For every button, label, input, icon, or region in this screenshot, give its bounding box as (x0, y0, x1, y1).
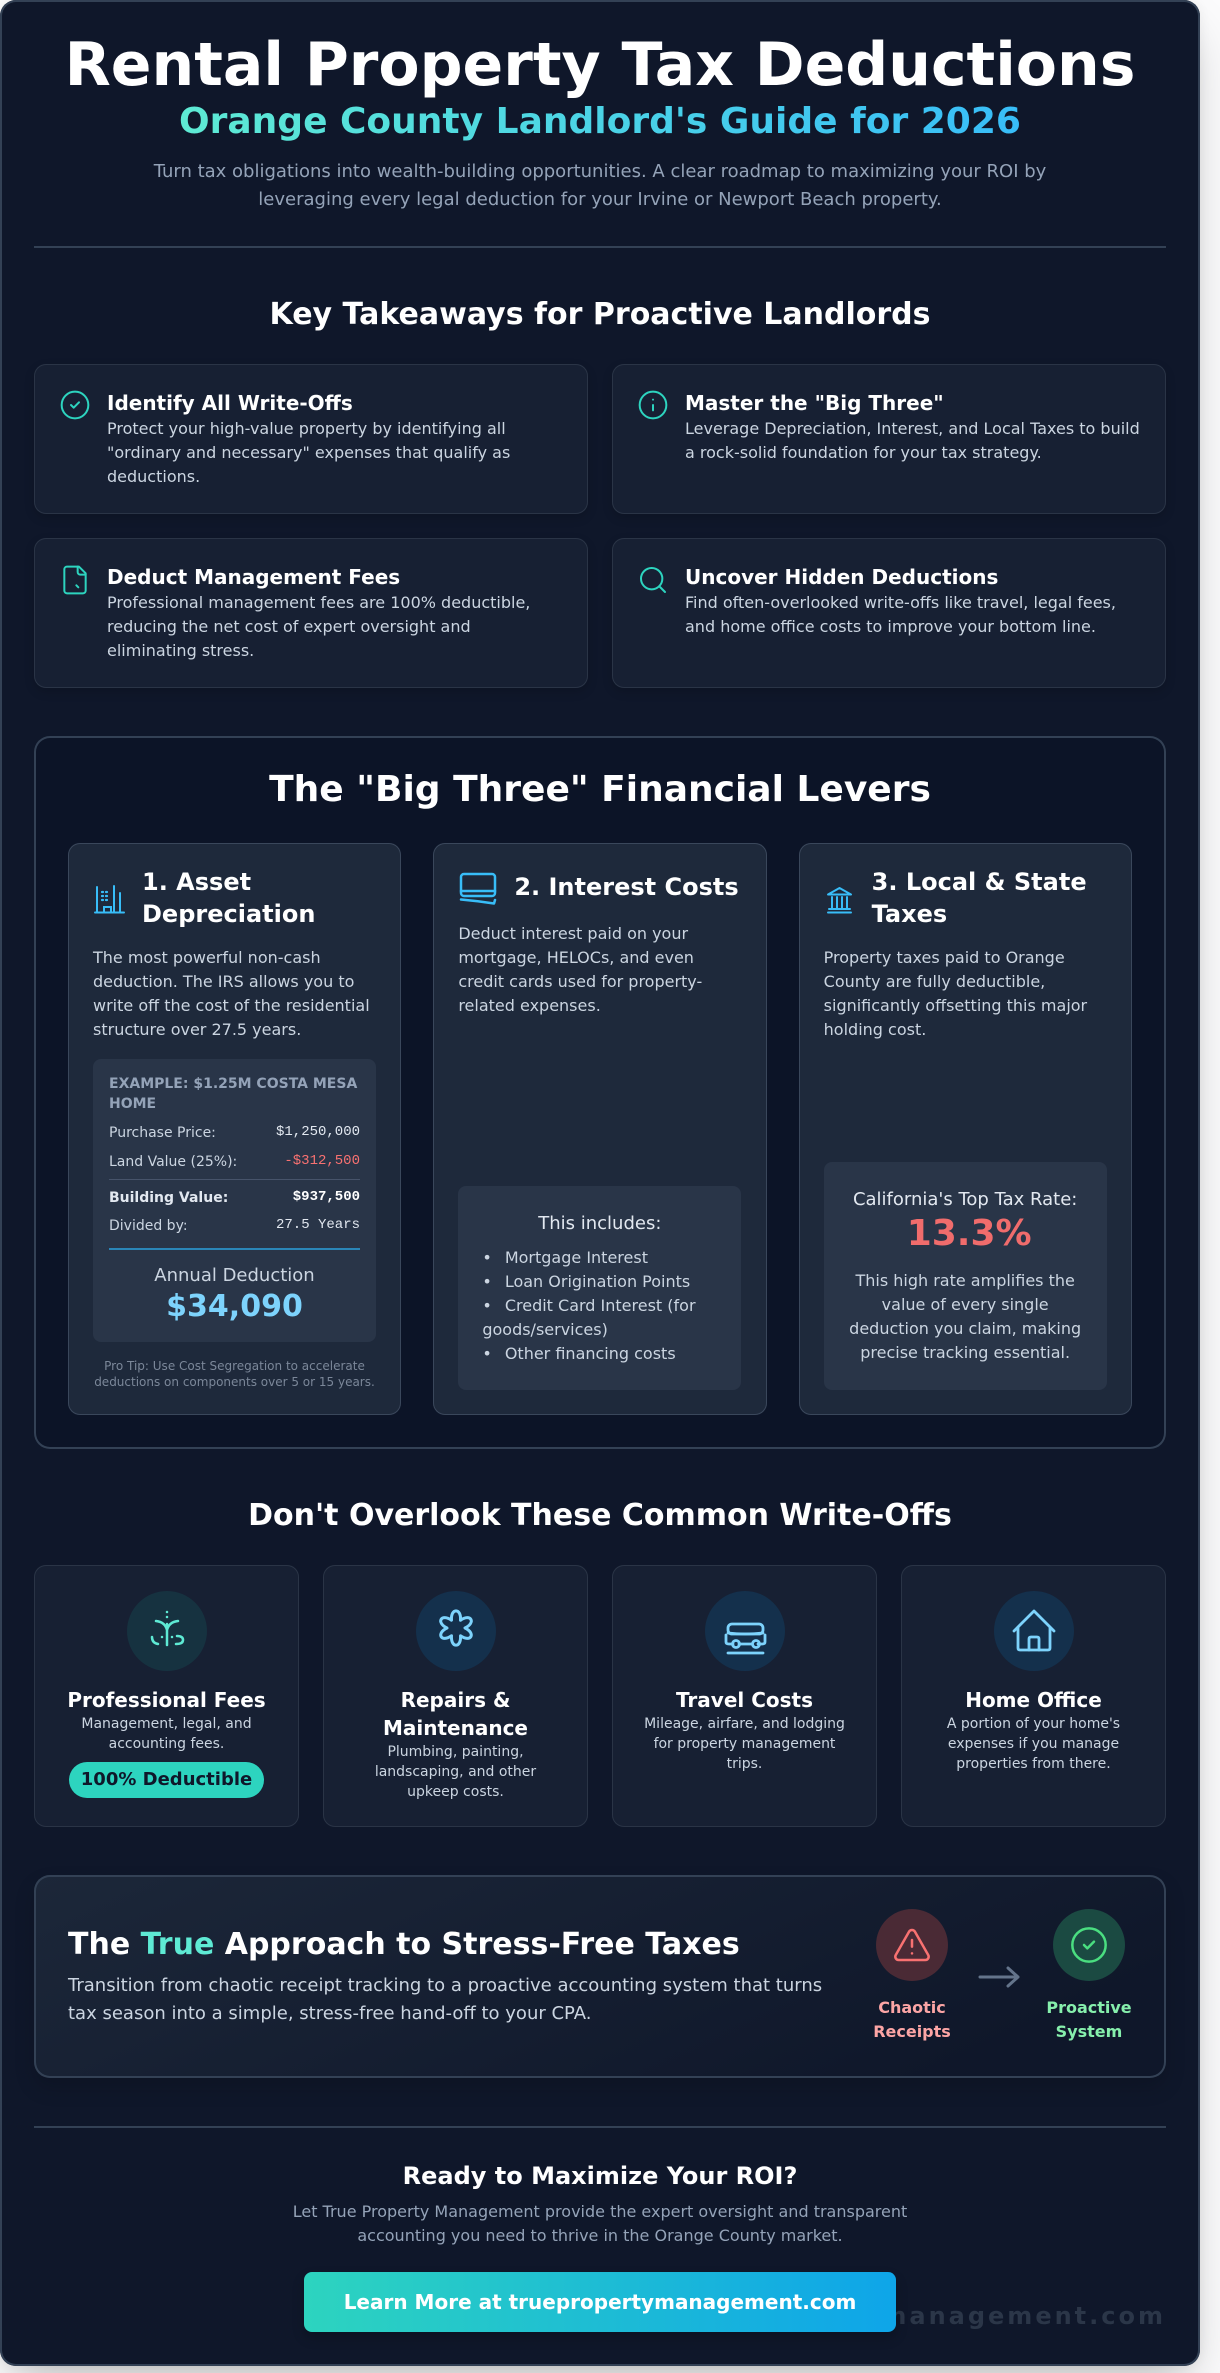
panel: true approach (34, 1875, 1166, 2078)
badge (69, 1762, 264, 1798)
card text: trips. (727, 1756, 762, 1772)
card text: significantly offsetting this major (824, 996, 1087, 1015)
tax rate note (849, 1271, 1081, 1362)
card text: deductions. (107, 467, 200, 486)
row: building value: $937,500 (293, 1189, 360, 1205)
tax rate box (824, 1162, 1107, 1390)
includes list: Loan Origination Points (505, 1272, 690, 1291)
tax rate note: value of every single (882, 1295, 1049, 1314)
card text (92, 948, 370, 1039)
card text: properties from there. (956, 1756, 1111, 1772)
panel: deduct management fees (34, 538, 588, 688)
text (68, 1975, 822, 2024)
tax rate note: This high rate amplifies the (855, 1271, 1075, 1290)
icon: warning (876, 1909, 948, 1981)
card text: landscaping, and other (375, 1764, 536, 1780)
card text (458, 924, 702, 1015)
card text: for property management (654, 1736, 835, 1752)
panel: identify all write-offs (34, 364, 588, 514)
panel: big three section background (34, 736, 1166, 1448)
row: divided by (109, 1217, 360, 1234)
card text: and home office costs to improve your bottom line. (685, 617, 1096, 636)
card text (824, 948, 1088, 1039)
card heading: Master the "Big Three" (685, 391, 944, 415)
row: land value: Land Value (25%): (109, 1154, 237, 1170)
row: land value (109, 1153, 360, 1170)
row: land value: -$312,500 (284, 1153, 360, 1169)
arrow (978, 1966, 1020, 1988)
button (304, 2272, 896, 2332)
intro text: Turn tax obligations into wealth-building opportunities. A clear roadmap to maximizing your ROI by (154, 161, 1046, 182)
card text: The most powerful non-cash (93, 948, 321, 967)
panel: asset depreciation (68, 842, 401, 1415)
card text: expenses if you manage (948, 1736, 1119, 1752)
panel: professional fees (34, 1565, 299, 1827)
text: tax season into a simple, stress-free hand-off to your CPA. (68, 2003, 591, 2024)
card text (947, 1716, 1120, 1772)
card heading: Depreciation (142, 900, 315, 928)
row: divided by: 27.5 Years (276, 1217, 360, 1233)
icon: check circle (60, 390, 90, 420)
card heading: Uncover Hidden Deductions (685, 565, 998, 589)
panel: uncover hidden deductions (612, 538, 1166, 688)
card heading: 3. Local & State (872, 868, 1087, 896)
heading: write-offs: Don't Overlook These Common Write-Offs (248, 1498, 952, 1533)
icon: building (94, 885, 125, 914)
tax rate note: deduction you claim, making (849, 1319, 1081, 1338)
includes list: • (482, 1296, 492, 1315)
icon: car (704, 1591, 784, 1671)
card text: mortgage, HELOCs, and even (458, 948, 694, 967)
includes heading: This includes: (538, 1213, 661, 1234)
call to action text: accounting you need to thrive in the Orange County market. (357, 2226, 843, 2245)
panel: travel costs (612, 1565, 877, 1827)
pro tip (94, 1358, 375, 1388)
includes list: goods/services) (482, 1320, 608, 1339)
panel: interest costs (433, 842, 767, 1415)
card text (107, 593, 530, 660)
tax rate note: precise tracking essential. (860, 1343, 1070, 1362)
annual deduction label: Annual Deduction (154, 1265, 315, 1286)
icon: info circle (638, 390, 668, 420)
example calculation box (93, 1059, 376, 1342)
icon: document (63, 566, 87, 594)
card text: Property taxes paid to Orange (824, 948, 1065, 967)
heading: key takeaways: Key Takeaways for Proactive Landlords (269, 296, 931, 332)
card text: Protect your high-value property by identifying all (107, 419, 506, 438)
includes list: Mortgage Interest (505, 1248, 648, 1267)
row: building value (109, 1189, 360, 1206)
row: building value: Building Value: (109, 1190, 228, 1206)
example title: HOME (109, 1096, 156, 1112)
label: proactive system: System (1056, 2022, 1122, 2041)
tax rate value: 13.3% (907, 1213, 1032, 1254)
card text: structure over 27.5 years. (93, 1020, 301, 1039)
panel: local and state taxes (799, 842, 1132, 1415)
icon: credit monitor (460, 872, 496, 905)
card text: "ordinary and necessary" expenses that qualify as (107, 443, 510, 462)
row: purchase price: $1,250,000 (276, 1124, 360, 1140)
includes list: Other financing costs (505, 1344, 676, 1363)
card text: Find often-overlooked write-offs like travel, legal fees, (685, 593, 1116, 612)
card text (107, 419, 510, 486)
intro text (154, 161, 1046, 210)
card text: County are fully deductible, (824, 972, 1045, 991)
subtitle: Orange County Landlord's Guide for 2026 (179, 101, 1021, 142)
card text: Leverage Depreciation, Interest, and Local Taxes to build (685, 419, 1140, 438)
intro text: leveraging every legal deduction for your Irvine or Newport Beach property. (258, 189, 942, 210)
card heading: Identify All Write-Offs (107, 391, 353, 415)
title: Rental Property Tax Deductions (65, 30, 1135, 100)
card text: accounting fees. (109, 1736, 224, 1752)
card heading: Maintenance (383, 1716, 528, 1740)
row: divided by: Divided by: (109, 1218, 188, 1234)
includes box (458, 1186, 741, 1390)
label: chaotic receipts (873, 1998, 951, 2041)
panel: home office (901, 1565, 1166, 1827)
tax rate label: California's Top Tax Rate: (853, 1189, 1077, 1210)
card heading: Repairs & (401, 1688, 510, 1712)
label: proactive system: Proactive (1046, 1998, 1132, 2017)
includes list: • (482, 1272, 492, 1291)
row: purchase price: Purchase Price: (109, 1125, 216, 1141)
card heading: Home Office (965, 1688, 1102, 1712)
panel: master the big three (612, 364, 1166, 514)
watermark: truepropertymanagement.com (671, 2302, 1166, 2330)
card heading (383, 1688, 528, 1740)
card text: deduction. The IRS allows you to (93, 972, 354, 991)
heading: call to action: Ready to Maximize Your ROI? (403, 2162, 797, 2190)
card text: Plumbing, painting, (387, 1744, 524, 1760)
card heading (872, 868, 1087, 928)
card text: eliminating stress. (107, 641, 254, 660)
card text: related expenses. (458, 996, 601, 1015)
icon: house (994, 1591, 1074, 1671)
includes list: • (482, 1248, 492, 1267)
card text: A portion of your home's (947, 1716, 1120, 1732)
row: purchase price (109, 1124, 360, 1141)
example title (109, 1076, 358, 1112)
card text: Mileage, airfare, and lodging (644, 1716, 845, 1732)
card text: Management, legal, and (81, 1716, 252, 1732)
card text (685, 419, 1140, 462)
badge: 100% Deductible (81, 1769, 252, 1790)
icon: fountain (126, 1591, 206, 1671)
pro tip: deductions on components over 5 or 15 years. (94, 1374, 375, 1388)
card heading: 1. Asset (142, 868, 251, 896)
includes list (482, 1248, 696, 1363)
card heading: Professional Fees (67, 1688, 266, 1712)
heading: The True Approach to Stress-Free Taxes (68, 1927, 740, 1962)
panel: repairs and maintenance (323, 1565, 588, 1827)
label: chaotic receipts: Chaotic (878, 1998, 946, 2017)
card text (81, 1716, 252, 1752)
card heading: Travel Costs (676, 1688, 813, 1712)
call to action text (293, 2202, 907, 2245)
card text: credit cards used for property- (458, 972, 702, 991)
card text: write off the cost of the residential (93, 996, 370, 1015)
card text: reducing the net cost of expert oversight and (107, 617, 471, 636)
annual deduction value: $34,090 (166, 1289, 303, 1324)
card text: upkeep costs. (407, 1784, 504, 1800)
icon: proactive check (1053, 1909, 1125, 1981)
card heading: 2. Interest Costs (514, 872, 739, 900)
card text (685, 593, 1116, 636)
call to action text: Let True Property Management provide the expert oversight and transparent (293, 2202, 907, 2221)
card heading: Deduct Management Fees (107, 565, 400, 589)
card text (375, 1744, 536, 1800)
card text: Deduct interest paid on your (458, 924, 688, 943)
includes list: Credit Card Interest (for (505, 1296, 696, 1315)
pro tip: Pro Tip: Use Cost Segregation to accelerate (104, 1358, 365, 1372)
card text (644, 1716, 845, 1772)
icon: wrench blob (416, 1591, 496, 1671)
example title: EXAMPLE: $1.25M COSTA MESA (109, 1076, 357, 1092)
text: Transition from chaotic receipt tracking to a proactive accounting system that turns (68, 1975, 822, 1996)
label: proactive system (1046, 1998, 1132, 2041)
label: chaotic receipts: Receipts (873, 2022, 951, 2041)
card heading (142, 868, 315, 928)
card text: holding cost. (824, 1020, 926, 1039)
icon: magnifier (640, 567, 666, 593)
icon: bank (827, 887, 852, 914)
card text: a rock-solid foundation for your tax strategy. (685, 443, 1042, 462)
heading: big three: The "Big Three" Financial Levers (269, 769, 931, 810)
card text: Professional management fees are 100% deductible, (107, 593, 530, 612)
card heading: Taxes (872, 900, 947, 928)
includes list: • (482, 1344, 492, 1363)
button: Learn More at truepropertymanagement.com (344, 2290, 856, 2314)
